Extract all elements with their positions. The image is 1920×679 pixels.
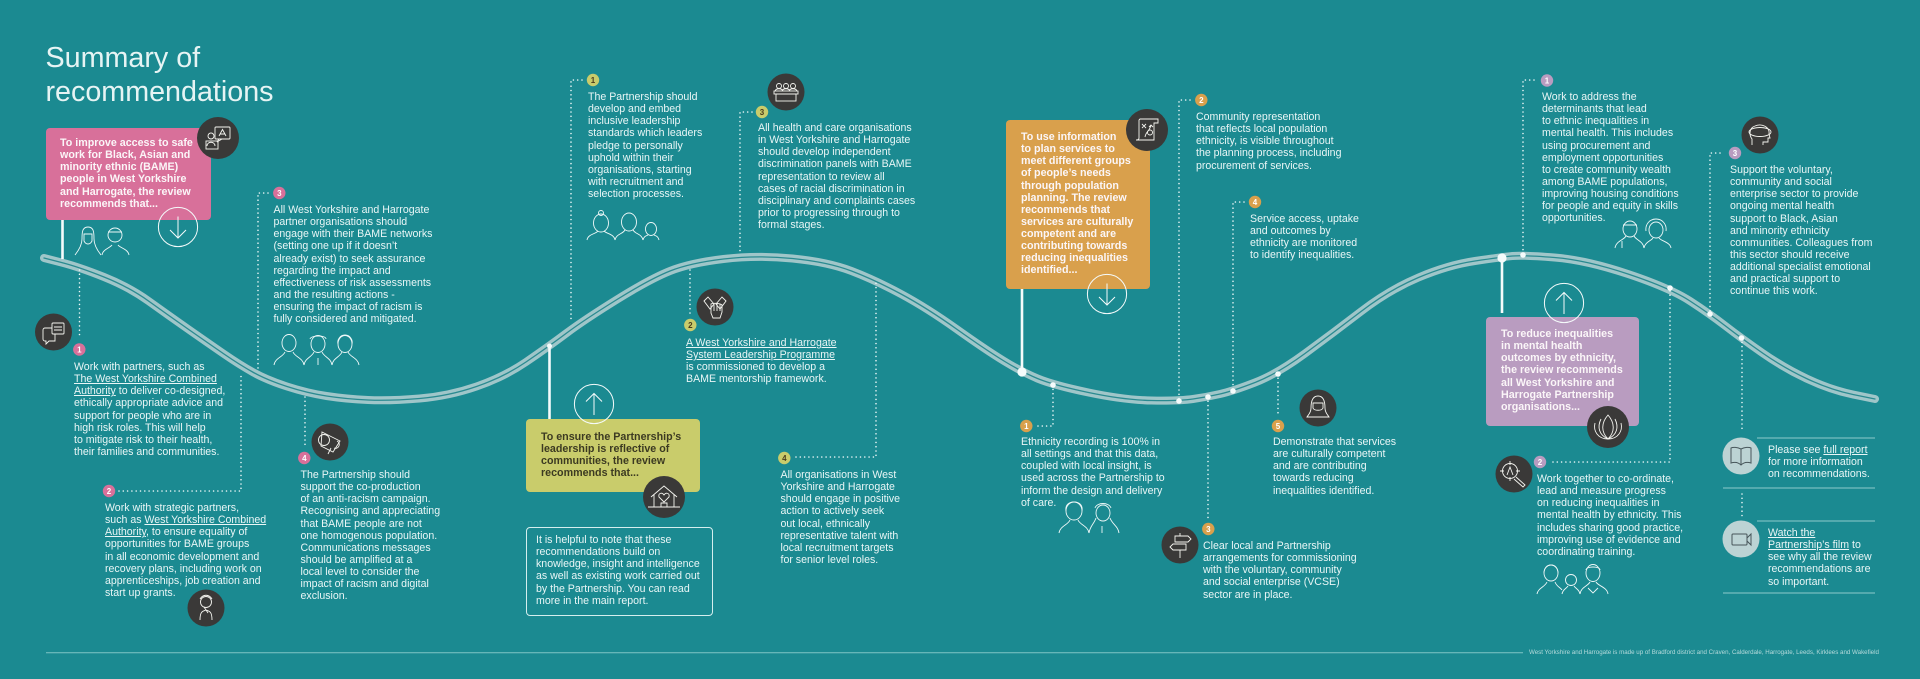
text: yellow recommendation 4: Yorkshire and Harrogate bbox=[780, 481, 895, 493]
badge: orange 5: 5 bbox=[1276, 422, 1281, 431]
text: purple recommendation 1: mental health. This includes bbox=[1542, 127, 1673, 139]
text: orange recommendation 4 bbox=[1250, 213, 1359, 261]
badge: orange 3 bbox=[1202, 523, 1215, 535]
text: orange recommendation 2: that reflects local population bbox=[1196, 123, 1327, 135]
text: yellow recommendation 3: discrimination panels with BAME bbox=[758, 158, 912, 170]
icon: lotus flower bbox=[1587, 406, 1629, 448]
text: film pointer: Watch the bbox=[1768, 527, 1815, 539]
badge: orange 2: 2 bbox=[1199, 96, 1204, 105]
text: yellow recommendation 3: All health and care organisations bbox=[758, 122, 912, 134]
badge: pink 3: 3 bbox=[277, 189, 282, 198]
text: yellow recommendation 4: representative talent with bbox=[780, 530, 898, 542]
text: orange recommendation 1: Ethnicity recording is 100% in bbox=[1021, 436, 1160, 448]
text: purple recommendation 3: support to Black, Asian bbox=[1730, 212, 1838, 224]
text: yellow recommendation 3: prior to progressing through to bbox=[758, 207, 900, 219]
text: yellow recommendation 1: uphold within their bbox=[588, 152, 673, 164]
text: full report pointer: for more information bbox=[1768, 456, 1863, 468]
text: pink recommendation 1: support for people who are in bbox=[74, 410, 211, 422]
text: purple recommendation 2: lead and measure progress bbox=[1537, 485, 1666, 497]
text: yellow recommendation 4: out local, ethnically bbox=[780, 518, 870, 530]
text: purple recommendation 1: improving housing conditions bbox=[1542, 188, 1679, 200]
heading: orange box text: meet different groups bbox=[1021, 155, 1131, 167]
text: pink recommendation 3: fully considered and mitigated. bbox=[274, 313, 417, 325]
arrow: up, yellow section bbox=[574, 384, 614, 424]
heading: pink box text bbox=[60, 137, 193, 210]
text: pink recommendation 4: local level to consider the bbox=[300, 566, 419, 578]
text: pink recommendation 1: Work with partners, such as bbox=[74, 361, 205, 373]
text: pink recommendation 1: to mitigate risk to their health, bbox=[74, 434, 212, 446]
text: purple recommendation 2: Work together to co-ordinate, bbox=[1537, 473, 1674, 485]
badge: yellow 3: 3 bbox=[760, 108, 765, 117]
text: purple recommendation 1: to create community wealth bbox=[1542, 164, 1671, 176]
text: pink recommendation 1: high risk roles. This will help bbox=[74, 422, 206, 434]
text: purple recommendation 3: communities. Colleagues from bbox=[1730, 237, 1872, 249]
title bbox=[46, 42, 274, 108]
text: film pointer bbox=[1768, 527, 1872, 588]
heading: purple box text: organisations... bbox=[1501, 401, 1580, 413]
text: pink recommendation 1: ethically appropriate advice and bbox=[74, 397, 223, 409]
badge: pink 1 bbox=[73, 343, 86, 356]
icon: megaphone bbox=[312, 424, 348, 460]
badge: purple 3: 3 bbox=[1733, 149, 1738, 158]
heading: purple box text: Harrogate Partnership bbox=[1501, 389, 1614, 401]
text: full report pointer: Please see full report bbox=[1768, 444, 1868, 456]
dotted connectors bbox=[80, 80, 1742, 518]
text: yellow recommendation 2: BAME mentorship framework. bbox=[686, 373, 827, 385]
text: pink recommendation 2: recovery plans, including work on bbox=[105, 563, 262, 575]
icon: worker with headset bbox=[188, 590, 224, 626]
text: pink recommendation 4: impact of racism and digital bbox=[300, 578, 429, 590]
heading: orange box text: through population bbox=[1021, 180, 1119, 192]
text: orange recommendation 3: with the voluntary, community bbox=[1203, 564, 1342, 576]
text: purple recommendation 3: community and social bbox=[1730, 176, 1832, 188]
text: pink recommendation 2: in all economic development and bbox=[105, 550, 259, 562]
text: information note bbox=[536, 534, 700, 607]
icon: house with heart bbox=[643, 476, 685, 518]
wave timeline bbox=[44, 256, 1875, 401]
text: pink recommendation 4: of an anti-racism campaign. bbox=[300, 493, 431, 505]
badge: orange 4 bbox=[1249, 196, 1261, 208]
text: orange recommendation 4: ethnicity are monitored bbox=[1250, 237, 1357, 249]
text: pink recommendation 4 bbox=[300, 469, 440, 602]
text: film pointer: recommendations are bbox=[1768, 563, 1870, 575]
heading: orange box text: recommends that bbox=[1021, 204, 1110, 216]
heading: purple box text: all West Yorkshire and bbox=[1501, 376, 1614, 388]
text: orange recommendation 5: are culturally competent bbox=[1273, 448, 1385, 460]
horizontal rules, signposting panel bbox=[1723, 438, 1875, 593]
text: yellow recommendation 1: standards which leaders bbox=[588, 127, 702, 139]
heading: pink box text: people in West Yorkshire bbox=[60, 173, 187, 185]
text: pink recommendation 3: partner organisations should bbox=[274, 216, 407, 228]
icon: signpost bbox=[1162, 526, 1198, 564]
text: information note: It is helpful to note that these bbox=[536, 534, 671, 546]
text: orange recommendation 5: and are contributing bbox=[1273, 460, 1367, 472]
text: pink recommendation 3: regarding the impact and bbox=[274, 265, 391, 277]
badge: yellow 1: 1 bbox=[591, 76, 596, 85]
text: purple recommendation 3: ongoing mental health bbox=[1730, 200, 1834, 212]
text: orange recommendation 2 bbox=[1196, 111, 1341, 172]
text: purple recommendation 2: improving use of evidence and bbox=[1537, 534, 1681, 546]
icon: target magnifier bbox=[1496, 456, 1532, 492]
badge: pink 1: 1 bbox=[77, 345, 82, 354]
text: film pointer: see why all the review bbox=[1768, 551, 1872, 563]
text: yellow recommendation 1 bbox=[588, 91, 702, 200]
text: orange recommendation 2: the planning process, including bbox=[1196, 147, 1341, 159]
badge: yellow 3 bbox=[756, 106, 768, 118]
text: yellow recommendation 1: The Partnership should bbox=[588, 91, 698, 103]
text: yellow recommendation 4: All organisations in West bbox=[780, 469, 896, 481]
text: pink recommendation 1: their families and communities. bbox=[74, 446, 219, 458]
text: purple recommendation 3: and practical support to bbox=[1730, 273, 1840, 285]
badge: yellow 4: 4 bbox=[782, 454, 787, 463]
badge: pink 2 bbox=[103, 485, 115, 497]
text: pink recommendation 3: ensuring the impact of racism is bbox=[274, 301, 422, 313]
text: pink recommendation 3: and the resulting actions - bbox=[274, 289, 395, 301]
text: purple recommendation 3: and minority ethnicity bbox=[1730, 225, 1830, 237]
text: information note: recommendations build on bbox=[536, 546, 660, 558]
text: pink recommendation 4: Communications messages bbox=[300, 542, 431, 554]
text: orange recommendation 1: all settings and that this data, bbox=[1021, 448, 1158, 460]
coloured recommendation box: orange bbox=[1006, 120, 1150, 289]
text: orange recommendation 3: arrangements for commissioning bbox=[1203, 552, 1357, 564]
text: orange recommendation 2: procurement of services. bbox=[1196, 160, 1312, 172]
text: yellow recommendation 3: representation to review all bbox=[758, 170, 885, 182]
heading: pink box text: work for Black, Asian and bbox=[60, 149, 190, 161]
text: film pointer: so important. bbox=[1768, 576, 1829, 588]
footer rule bbox=[46, 652, 1523, 654]
text: orange recommendation 4: Service access, uptake bbox=[1250, 213, 1359, 225]
text: orange recommendation 3: and social enterprise (VCSE) bbox=[1203, 576, 1340, 588]
heading: yellow box text bbox=[541, 431, 681, 479]
text: orange recommendation 5: Demonstrate that services bbox=[1273, 436, 1396, 448]
heading: orange box text: To use information bbox=[1021, 131, 1116, 143]
text: yellow recommendation 3: in West Yorkshire and Harrogate bbox=[758, 134, 910, 146]
text: full report pointer bbox=[1768, 444, 1870, 480]
text: yellow recommendation 3 bbox=[758, 122, 915, 231]
text: purple recommendation 1: determinants that lead bbox=[1542, 103, 1647, 115]
text: pink recommendation 2: Work with strategic partners, bbox=[105, 502, 239, 514]
information note box bbox=[526, 527, 712, 616]
text: pink recommendation 2 bbox=[105, 502, 266, 599]
badge: orange 2 bbox=[1195, 94, 1208, 106]
heading: purple box text: outcomes by ethnicity, bbox=[1501, 352, 1616, 364]
text: purple recommendation 3: this sector should receive bbox=[1730, 249, 1850, 261]
badge: yellow 2 bbox=[684, 319, 696, 331]
text: yellow recommendation 3: formal stages. bbox=[758, 219, 825, 231]
text: yellow recommendation 1: inclusive leadership bbox=[588, 115, 680, 127]
text: pink recommendation 3: All West Yorkshire and Harrogate bbox=[274, 204, 429, 216]
text: orange recommendation 5 bbox=[1273, 436, 1396, 496]
text: yellow recommendation 3: disciplinary and complaints cases bbox=[758, 195, 915, 207]
text: orange recommendation 1: inform the design and delivery bbox=[1021, 484, 1162, 496]
icon: head with orbit bbox=[1742, 116, 1778, 154]
text: pink recommendation 3 bbox=[274, 204, 432, 325]
people illustration: three people, pink bbox=[274, 334, 359, 365]
text: purple recommendation 2: mental health by ethnicity. This bbox=[1537, 509, 1681, 521]
text: yellow recommendation 2 bbox=[686, 337, 837, 385]
text: pink recommendation 3: already exist) to seek assurance bbox=[274, 252, 425, 264]
text: pink recommendation 2: such as West Yorkshire Combined bbox=[105, 514, 266, 526]
text: yellow recommendation 4: local recruitment targets bbox=[780, 542, 894, 554]
icon: handshake hands bbox=[696, 288, 734, 326]
text: pink recommendation 1: The West Yorkshire Combined bbox=[74, 373, 217, 385]
text: pink recommendation 4: that BAME people are not bbox=[300, 518, 422, 530]
text: pink recommendation 4: exclusion. bbox=[300, 590, 348, 602]
people illustration: family, purple bbox=[1537, 564, 1608, 594]
text: yellow recommendation 3: should develop independent bbox=[758, 146, 891, 158]
coloured recommendation box: pink bbox=[46, 128, 211, 220]
heading: yellow box text: leadership is reflective of bbox=[541, 443, 669, 455]
heading: purple box text: the review recommends bbox=[1501, 364, 1623, 376]
heading: purple box text bbox=[1501, 328, 1623, 413]
coloured recommendation box: purple bbox=[1486, 317, 1639, 426]
text: purple recommendation 3 bbox=[1730, 164, 1872, 297]
text: purple recommendation 1: among BAME populations, bbox=[1542, 176, 1667, 188]
text: orange recommendation 1 bbox=[1021, 436, 1165, 509]
text: orange recommendation 1: used across the Partnership to bbox=[1021, 472, 1165, 484]
heading: pink box text: minority ethnic (BAME) bbox=[60, 161, 178, 173]
text: purple recommendation 1 bbox=[1542, 91, 1679, 224]
text: pink recommendation 4: The Partnership should bbox=[300, 469, 410, 481]
heading: orange box text: of people’s needs bbox=[1021, 167, 1111, 179]
heading: yellow box text: recommends that... bbox=[541, 467, 639, 479]
text: purple recommendation 2: coordinating training. bbox=[1537, 546, 1635, 558]
badge: orange 1: 1 bbox=[1024, 422, 1029, 431]
heading: orange box text bbox=[1021, 131, 1134, 276]
badge: pink 2: 2 bbox=[107, 487, 112, 496]
text: pink recommendation 1 bbox=[74, 361, 225, 458]
text: purple recommendation 3: additional specialist emotional bbox=[1730, 261, 1871, 273]
title: Summary of bbox=[46, 42, 200, 74]
badge: pink 4: 4 bbox=[302, 454, 307, 463]
heading: yellow box text: To ensure the Partnership’s bbox=[541, 431, 681, 443]
badge: orange 1 bbox=[1020, 420, 1032, 432]
heading: pink box text: and Harrogate, the review bbox=[60, 186, 191, 198]
text: pink recommendation 3: (setting one up if it doesn’t bbox=[274, 240, 397, 252]
heading: purple box text: To reduce inequalities bbox=[1501, 328, 1613, 340]
icon: plan on scroll bbox=[1126, 109, 1168, 151]
people illustration: two people, orange bbox=[1059, 502, 1119, 533]
text: pink recommendation 4: Recognising and appreciating bbox=[300, 505, 440, 517]
badge: orange 3: 3 bbox=[1206, 525, 1211, 534]
badge: yellow 2: 2 bbox=[688, 321, 693, 330]
badge: yellow 4 bbox=[778, 452, 790, 464]
badge: purple 1: 1 bbox=[1545, 76, 1550, 85]
badge: purple 1 bbox=[1541, 74, 1553, 87]
text: purple recommendation 1: for people and equity in skills bbox=[1542, 200, 1678, 212]
text: orange recommendation 2: ethnicity, is visible throughout bbox=[1196, 135, 1334, 147]
title: recommendations bbox=[46, 76, 274, 108]
people illustration: man and woman, purple bbox=[1615, 219, 1671, 248]
heading: pink box text: recommends that... bbox=[60, 198, 158, 210]
arrow: down, pink section bbox=[158, 207, 198, 247]
text: yellow recommendation 2: A West Yorkshire and Harrogate bbox=[686, 337, 837, 349]
icon: video camera bbox=[1722, 520, 1760, 558]
text: purple recommendation 1: employment opportunities bbox=[1542, 152, 1663, 164]
text: yellow recommendation 1: organisations, starting bbox=[588, 164, 692, 176]
arrow: up, purple section bbox=[1544, 283, 1584, 323]
text: purple recommendation 1: opportunities. bbox=[1542, 212, 1606, 224]
badge: yellow 1 bbox=[587, 74, 599, 86]
text: orange recommendation 5: inequalities identified. bbox=[1273, 484, 1374, 496]
text: yellow recommendation 1: pledge to personally bbox=[588, 140, 683, 152]
footer note: West Yorkshire and Harrogate is made up of Bradford district and Craven, Calderdale, Harrogate, Leeds, Kirklees and Wakefield bbox=[1529, 649, 1879, 656]
text: orange recommendation 3 bbox=[1203, 540, 1357, 600]
text: yellow recommendation 1: with recruitment and bbox=[588, 176, 683, 188]
text: yellow recommendation 4: should engage in positive bbox=[780, 493, 900, 505]
icon: interpreter speech bbox=[197, 117, 239, 159]
heading: orange box text: planning. The review bbox=[1021, 192, 1127, 204]
text: yellow recommendation 4: action to actively seek bbox=[780, 505, 884, 517]
text: purple recommendation 3: continue this work. bbox=[1730, 285, 1818, 297]
text: yellow recommendation 3: cases of racial discrimination in bbox=[758, 183, 905, 195]
icon: speech bubbles bbox=[35, 314, 72, 350]
badge: purple 2: 2 bbox=[1538, 458, 1543, 467]
heading: purple box text: in mental health bbox=[1501, 340, 1582, 352]
text: purple recommendation 2: on reducing inequalities in bbox=[1537, 497, 1660, 509]
heading: orange box text: identified... bbox=[1021, 264, 1077, 276]
text: pink recommendation 4: one homogenous population. bbox=[300, 530, 437, 542]
heading: orange box text: reducing inequalities bbox=[1021, 252, 1128, 264]
icon: panel at desk bbox=[768, 74, 804, 110]
heading: orange box text: competent and are bbox=[1021, 228, 1116, 240]
text: pink recommendation 3: engage with their BAME networks bbox=[274, 228, 432, 240]
badge: orange 5 bbox=[1272, 420, 1284, 432]
badge: pink 4 bbox=[298, 452, 310, 464]
text: pink recommendation 2: start up grants. bbox=[105, 587, 176, 599]
heading: orange box text: services are culturally bbox=[1021, 216, 1133, 228]
text: pink recommendation 2: apprenticeships, job creation and bbox=[105, 575, 260, 587]
text: yellow recommendation 2: System Leadership Programme bbox=[686, 349, 835, 361]
badge: pink 3 bbox=[273, 187, 285, 199]
text: yellow recommendation 2: is commissioned to develop a bbox=[686, 361, 825, 373]
text: purple recommendation 2: includes sharing good practice, bbox=[1537, 522, 1683, 534]
text: pink recommendation 4: support the co-production bbox=[300, 481, 421, 493]
text: pink recommendation 2: Authority, to ensure equality of bbox=[105, 526, 247, 538]
text: yellow recommendation 4: for senior level roles. bbox=[780, 554, 878, 566]
people illustration: three people, yellow bbox=[587, 210, 659, 240]
text: orange recommendation 3: Clear local and Partnership bbox=[1203, 540, 1331, 552]
text: yellow recommendation 1: selection processes. bbox=[588, 188, 684, 200]
badge: orange 4: 4 bbox=[1253, 198, 1258, 207]
text: purple recommendation 2 bbox=[1537, 473, 1683, 558]
text: pink recommendation 4: should be amplified at a bbox=[300, 554, 412, 566]
text: pink recommendation 1: Authority to deliver co-designed, bbox=[74, 385, 225, 397]
text: orange recommendation 4: to identify inequalities. bbox=[1250, 249, 1354, 261]
solid stems from boxes to timeline bbox=[62, 220, 1502, 419]
people illustration: woman and man, pink bbox=[75, 227, 129, 255]
text: information note: more in the main report. bbox=[536, 595, 648, 607]
text: yellow recommendation 1: develop and embed bbox=[588, 103, 681, 115]
text: purple recommendation 1: Work to address the bbox=[1542, 91, 1637, 103]
text: orange recommendation 1: of care. bbox=[1021, 497, 1056, 509]
text: orange recommendation 3: sector are in place. bbox=[1203, 588, 1293, 600]
text: purple recommendation 3: enterprise sector to provide bbox=[1730, 188, 1858, 200]
text: purple recommendation 3: Support the voluntary, bbox=[1730, 164, 1833, 176]
text: information note: by the Partnership. You can read bbox=[536, 582, 690, 594]
text: orange recommendation 2: Community representation bbox=[1196, 111, 1320, 123]
number badges bbox=[73, 74, 1741, 535]
text: pink recommendation 3: effectiveness of risk assessments bbox=[274, 277, 431, 289]
badge: purple 2 bbox=[1534, 456, 1546, 468]
arrow: down, orange section bbox=[1087, 274, 1127, 314]
text: information note: as well as existing work carried out bbox=[536, 570, 700, 582]
text: pink recommendation 2: opportunities for BAME groups bbox=[105, 538, 249, 550]
timeline nodes bbox=[547, 252, 1744, 404]
text: film pointer: Partnership’s film to bbox=[1768, 539, 1861, 551]
text: orange recommendation 4: and outcomes by bbox=[1250, 225, 1331, 237]
text: yellow recommendation 4 bbox=[780, 469, 900, 566]
heading: yellow box text: communities, the review bbox=[541, 455, 665, 467]
text: purple recommendation 1: using procurement and bbox=[1542, 140, 1650, 152]
text: orange recommendation 5: towards reducing bbox=[1273, 472, 1354, 484]
badge: purple 3 bbox=[1729, 147, 1741, 159]
text: full report pointer: on recommendations. bbox=[1768, 468, 1870, 480]
coloured recommendation box: yellow bbox=[526, 419, 700, 492]
text: information note: knowledge, insight and intelligence bbox=[536, 558, 700, 570]
heading: orange box text: contributing towards bbox=[1021, 240, 1127, 252]
text: purple recommendation 1: to ethnic inequalities in bbox=[1542, 115, 1649, 127]
text: orange recommendation 1: coupled with local insight, is bbox=[1021, 460, 1152, 472]
heading: orange box text: to plan services to bbox=[1021, 143, 1115, 155]
icon: open book bbox=[1722, 438, 1760, 474]
icon: woman in niqab bbox=[1300, 390, 1336, 426]
heading: pink box text: To improve access to safe bbox=[60, 137, 193, 149]
